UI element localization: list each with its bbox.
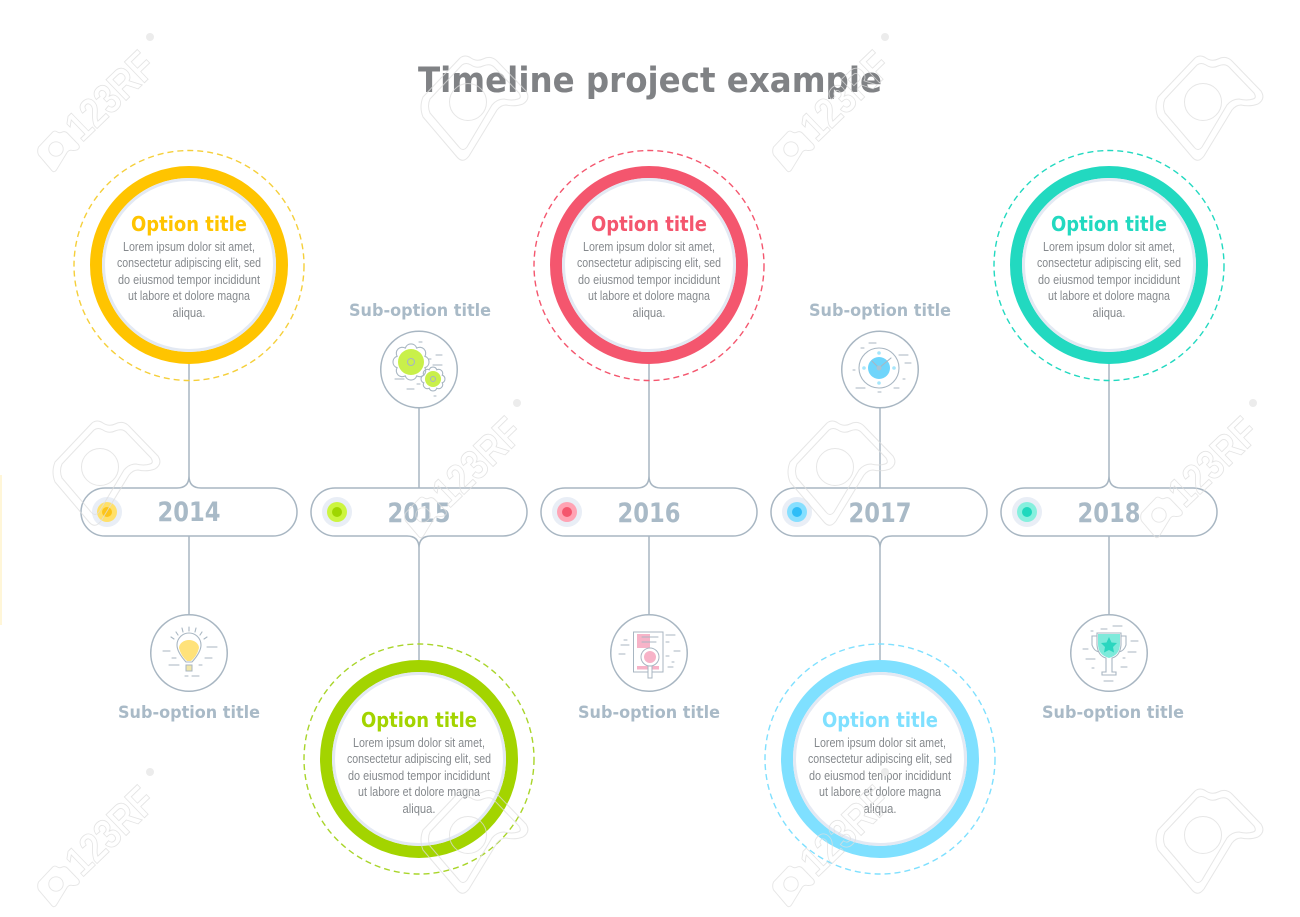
icon: document with magnifier bbox=[611, 615, 687, 691]
panel: 2018 option: aliqua. bbox=[1092, 305, 1126, 320]
watermark: 123RF logos: 123RF bbox=[1159, 408, 1268, 515]
connector: 2014 bbox=[188, 363, 190, 615]
panel: 2018 option bbox=[994, 150, 1224, 380]
panel: 2016 option: aliqua. bbox=[632, 305, 666, 320]
panel: 2017 option bbox=[765, 644, 995, 874]
label: sub-option 2016: Sub-option title bbox=[578, 703, 720, 723]
panel: 2018 option: do eiusmod tempor incididunt bbox=[1038, 272, 1180, 287]
panel: 2015 option: consectetur adipiscing elit, sed bbox=[347, 751, 491, 766]
panel: 2016 option: do eiusmod tempor incididunt bbox=[578, 272, 720, 287]
panel: 2015 option: Option title bbox=[361, 708, 477, 732]
year pill: 2018: 2018 bbox=[1078, 498, 1140, 529]
panel: 2015 option: do eiusmod tempor incididunt bbox=[348, 768, 490, 783]
connector: 2016 bbox=[648, 363, 650, 615]
connector: 2015 bbox=[418, 407, 420, 660]
panel: 2018 option: consectetur adipiscing elit, sed bbox=[1037, 255, 1181, 270]
panel: 2018 option: Option title bbox=[1051, 212, 1167, 236]
label: sub-option 2018: Sub-option title bbox=[1042, 703, 1184, 723]
icon: clock bbox=[842, 331, 918, 408]
connector: 2018 bbox=[1108, 363, 1110, 615]
panel: 2014 option: aliqua. bbox=[172, 305, 206, 320]
panel: 2017 option: Option title bbox=[822, 708, 938, 732]
year pill: 2014: 2014 bbox=[158, 497, 220, 528]
watermark: 123RF logos: 123RF bbox=[791, 42, 900, 149]
year pill: 2016: 2016 bbox=[618, 498, 680, 529]
panel: 2014 option: do eiusmod tempor incididunt bbox=[118, 272, 260, 287]
panel: 2016 option: ut labore et dolore magna bbox=[588, 288, 711, 303]
panel: 2015 option: Lorem ipsum dolor sit amet, bbox=[353, 735, 485, 750]
panel: 2018 option: ut labore et dolore magna bbox=[1048, 288, 1171, 303]
panel: 2014 option: Option title bbox=[131, 212, 247, 236]
year pill: 2015 bbox=[311, 488, 527, 548]
panel: 2016 option bbox=[534, 150, 764, 380]
year pill: 2018 bbox=[1001, 476, 1217, 536]
icon: light bulb bbox=[151, 615, 227, 691]
panel: 2014 option bbox=[74, 150, 304, 380]
panel: 2017 option: consectetur adipiscing elit, sed bbox=[808, 751, 952, 766]
icon: gears bbox=[381, 331, 457, 408]
panel: 2017 option: aliqua. bbox=[864, 801, 896, 816]
label: sub-option 2015: Sub-option title bbox=[349, 301, 491, 321]
year pill: 2016 bbox=[541, 476, 757, 536]
panel: 2017 option: ut labore et dolore magna bbox=[819, 784, 942, 799]
watermark: 123RF logos: 123RF bbox=[56, 777, 165, 884]
panel: 2018 option: Lorem ipsum dolor sit amet, bbox=[1043, 239, 1175, 254]
label: sub-option 2017: Sub-option title bbox=[809, 301, 951, 321]
year pill: 2015: 2015 bbox=[388, 498, 450, 529]
panel: 2016 option: Lorem ipsum dolor sit amet, bbox=[583, 239, 715, 254]
watermark: 123RF logos: 123RF bbox=[791, 777, 900, 884]
panel: 2017 option: Lorem ipsum dolor sit amet, bbox=[814, 735, 946, 750]
panel: 2017 option: do eiusmod tempor incididunt bbox=[809, 768, 951, 783]
label: sub-option 2014: Sub-option title bbox=[118, 703, 260, 723]
panel: 2015 option bbox=[304, 644, 534, 874]
title: Timeline project example bbox=[418, 61, 882, 101]
panel: 2015 option: aliqua. bbox=[402, 801, 436, 816]
connector: 2017 bbox=[879, 407, 881, 660]
year pill: 2014 bbox=[81, 476, 297, 536]
year pill: 2017: 2017 bbox=[848, 498, 912, 529]
panel: 2014 option: Lorem ipsum dolor sit amet, bbox=[123, 239, 255, 254]
watermark: 123RF logos: 123RF bbox=[56, 42, 165, 149]
panel: 2016 option: consectetur adipiscing elit, sed bbox=[577, 255, 721, 270]
icon: trophy bbox=[1071, 615, 1147, 691]
year pill: 2017 bbox=[771, 488, 987, 548]
panel: 2014 option: consectetur adipiscing elit, sed bbox=[117, 255, 261, 270]
panel: 2016 option: Option title bbox=[591, 212, 707, 236]
panel: 2014 option: ut labore et dolore magna bbox=[128, 288, 251, 303]
watermark: 123RF logos: 123RF bbox=[423, 408, 532, 515]
panel: 2015 option: ut labore et dolore magna bbox=[358, 784, 481, 799]
